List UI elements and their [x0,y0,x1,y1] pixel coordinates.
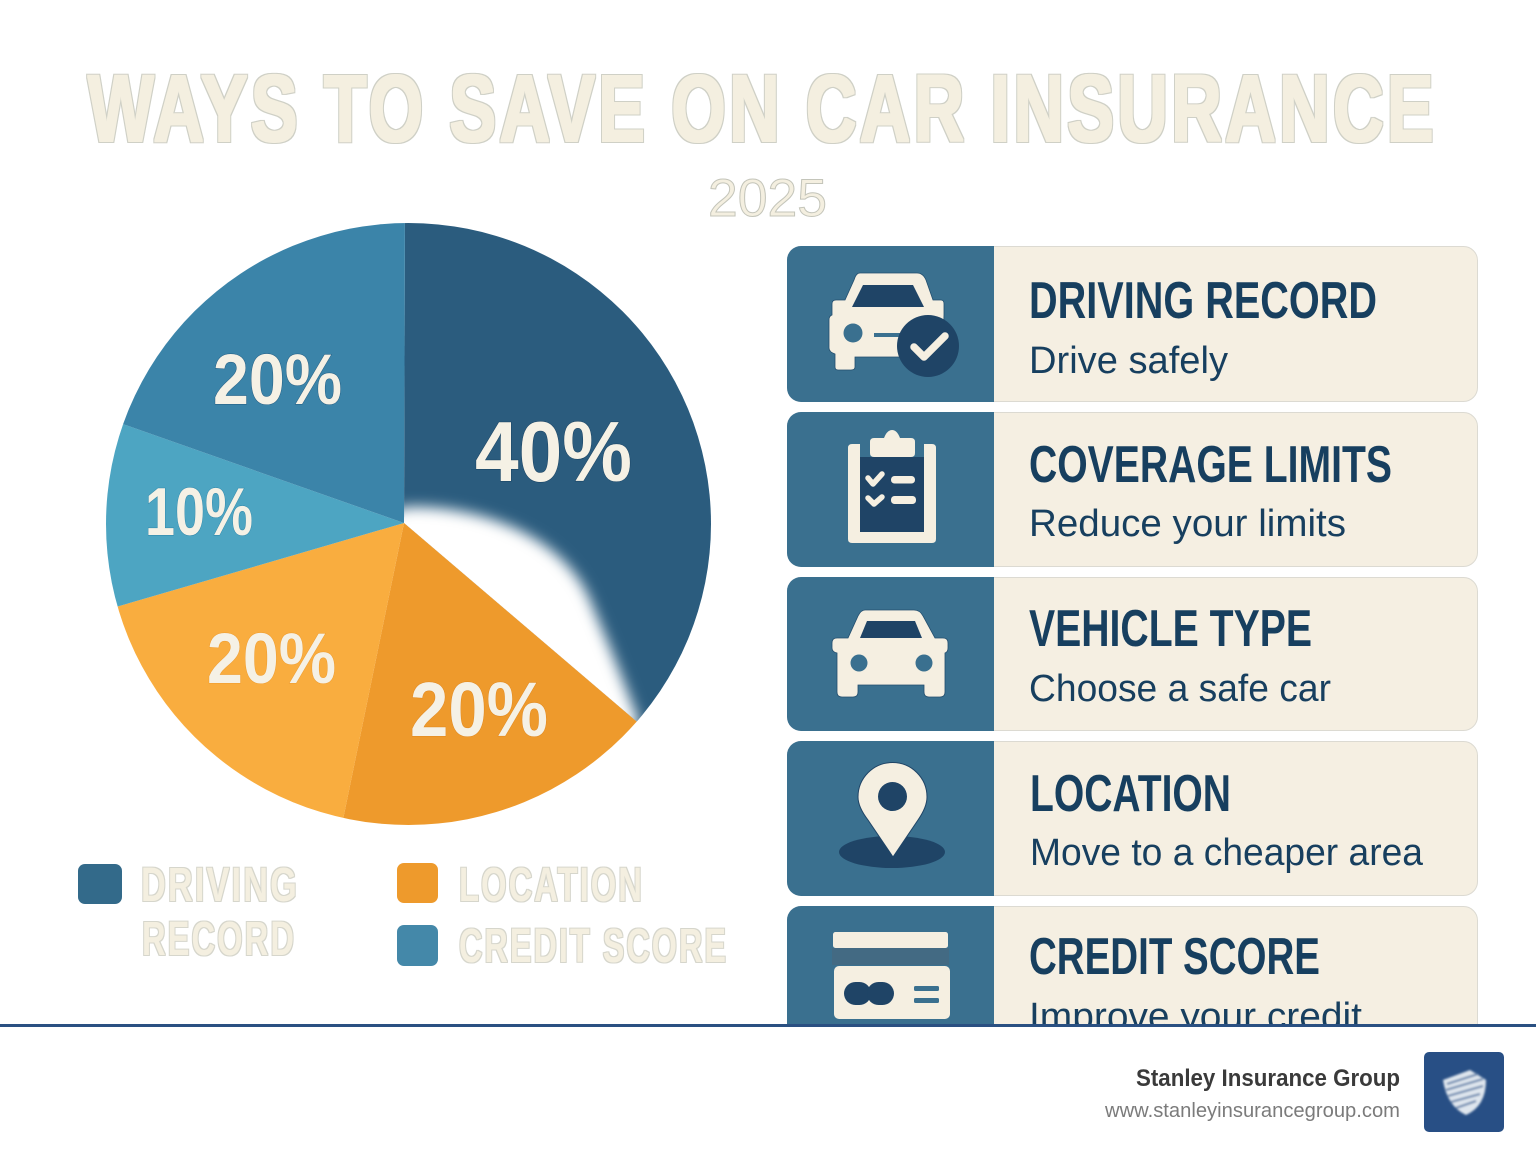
logo: shield [1424,1052,1504,1132]
card: coverage limits [787,412,1478,567]
label: 10%: 10% [145,474,253,550]
legend: driving record: RECORD [142,913,296,966]
tip text: Drive safely [1029,340,1228,382]
heading: DRIVING RECORD [1029,272,1377,330]
footer [0,1024,1536,1154]
label: 20% credit score: 20% [213,341,342,420]
slice: location 20% [343,523,637,825]
legend: driving record: DRIVING [141,859,299,912]
heading: COVERAGE LIMITS [1029,436,1392,494]
card: vehicle type [787,577,1478,731]
tip text: Improve your credit [1029,996,1362,1038]
heading: CREDIT SCORE [1029,928,1320,986]
tip text: Choose a safe car [1029,668,1331,710]
heading: VEHICLE TYPE [1029,600,1312,658]
label: 20% location: 20% [410,667,548,753]
label: 20% vehicle type: 20% [207,620,336,699]
panel: savings cards [787,246,1478,1060]
slice: driving record 40% [404,223,711,722]
icon: car with check badge [829,273,959,377]
card: driving record [787,246,1478,402]
label: 40%: 40% [475,405,632,500]
card: location [787,741,1478,896]
slice: vehicle type 20% [118,523,404,818]
heading: LOCATION [1030,765,1231,823]
legend [78,859,728,973]
legend: location: LOCATION [459,859,644,912]
legend: location [397,859,644,912]
subtitle: year: 2025 [708,169,827,228]
legend: credit score: CREDIT SCORE [459,920,728,973]
tip text: Move to a cheaper area [1030,832,1424,874]
icon: car front [832,610,948,697]
icon: map pin [839,762,945,868]
card: credit score [787,906,1478,1024]
legend: credit score [397,920,728,973]
slice: credit score 20% [123,223,405,523]
icon: clipboard checklist [848,430,936,543]
pie chart [106,223,711,825]
footer url: www.stanleyinsurancegroup.com [1104,1100,1400,1122]
footer brand name: Stanley Insurance Group [1136,1065,1400,1092]
slice: coverage limits 10% [106,424,404,606]
icon: credit card [832,932,950,1019]
tip text: Reduce your limits [1029,503,1346,545]
legend: driving record [78,859,299,966]
